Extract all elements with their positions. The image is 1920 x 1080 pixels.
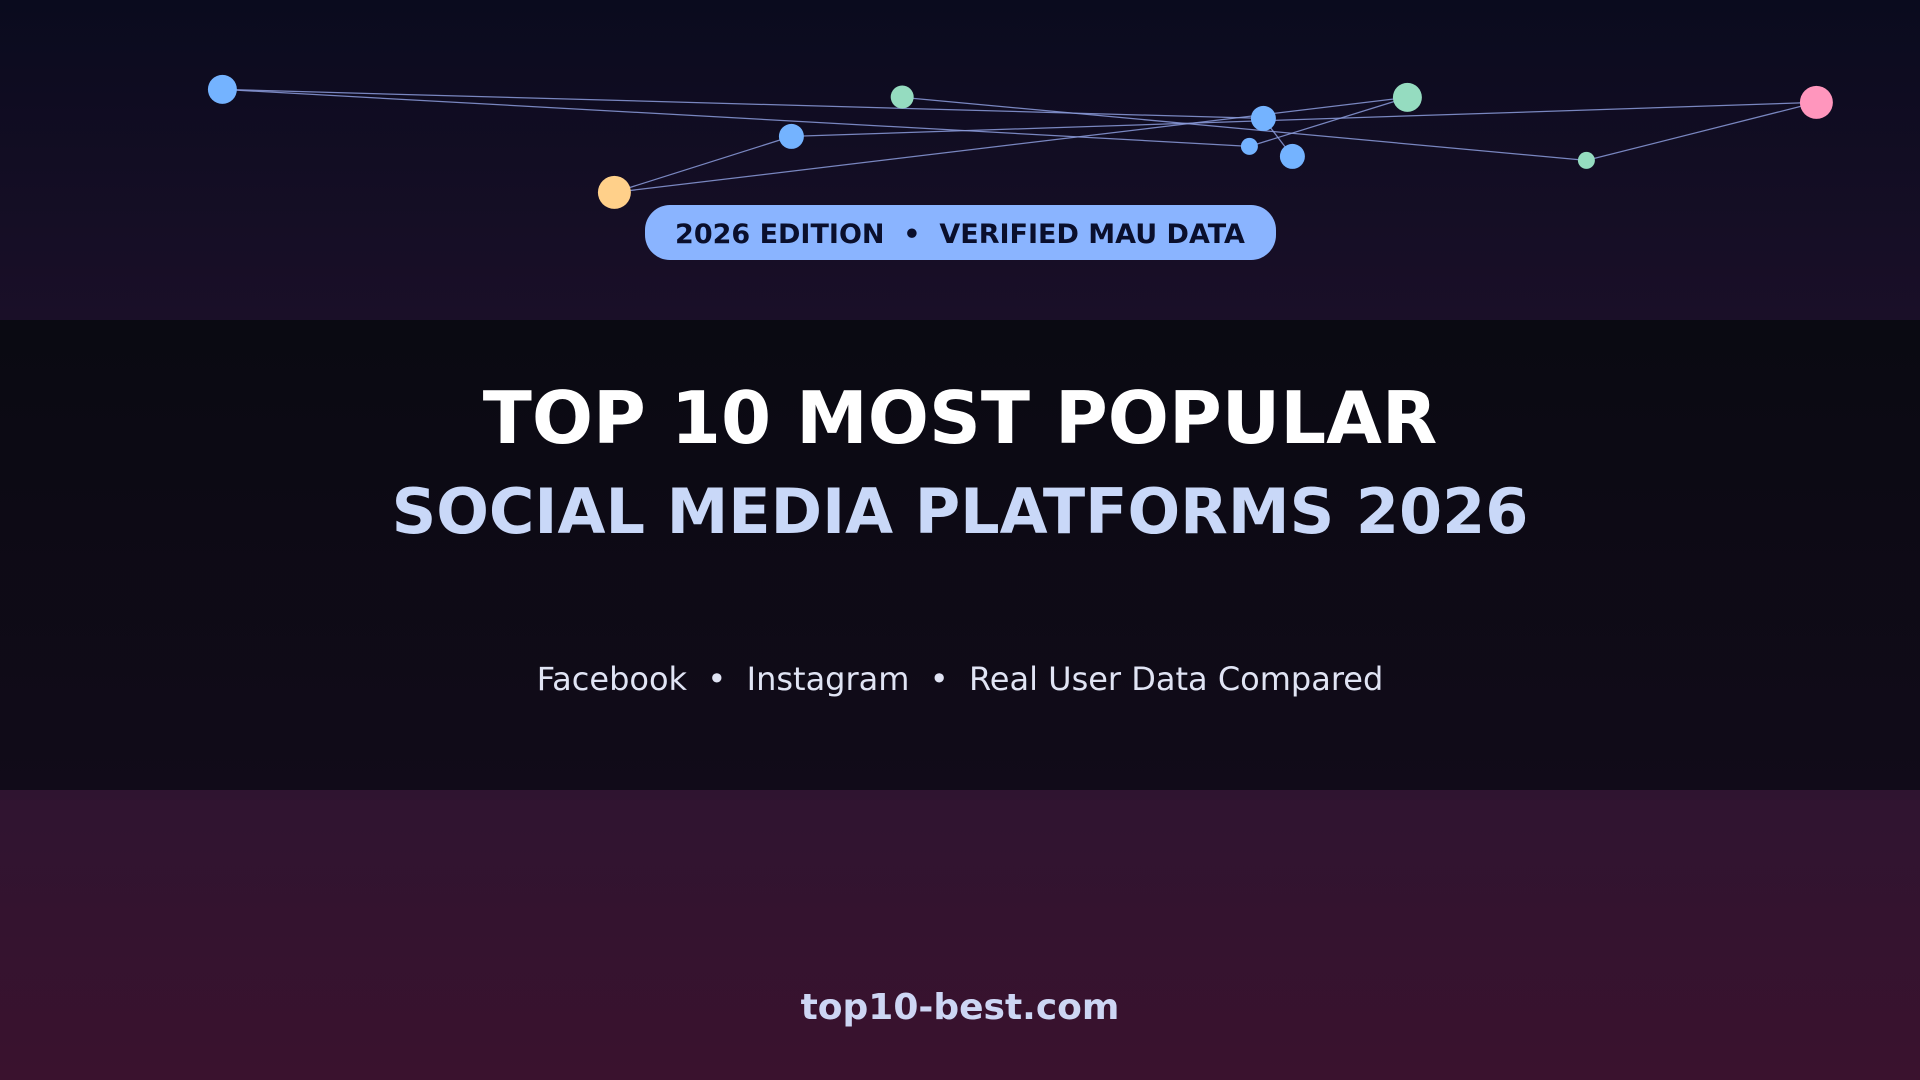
panel: footer band [0, 790, 1920, 1080]
badge: edition [645, 205, 1276, 260]
network graph [208, 75, 1833, 209]
network connections [222, 89, 1816, 192]
subtitle: SOCIAL MEDIA PLATFORMS 2026 [392, 475, 1528, 548]
tagline: Facebook • Instagram • Real User Data Compared [537, 660, 1383, 698]
panel: top network band [0, 0, 1920, 320]
title: TOP 10 MOST POPULAR [483, 376, 1437, 460]
network nodes [208, 75, 1833, 209]
footer website: top10-best.com [801, 987, 1119, 1028]
panel: title band [0, 320, 1920, 790]
badge: edition: 2026 EDITION • VERIFIED MAU DATA [675, 219, 1245, 250]
